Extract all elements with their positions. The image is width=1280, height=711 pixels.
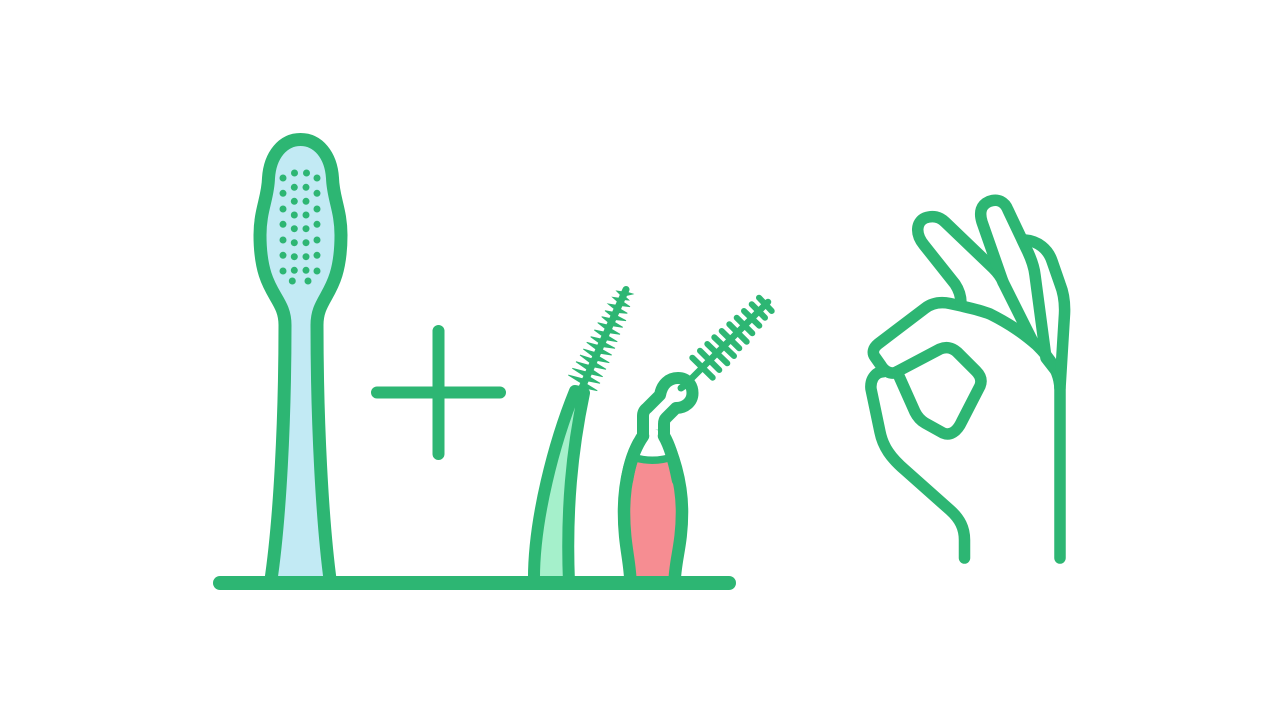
brush wire and bristles <box>684 298 772 386</box>
pink handle <box>624 436 682 583</box>
icon: tapered interdental brush <box>534 290 633 583</box>
ring head and neck <box>643 378 692 438</box>
thumb and index loop <box>897 348 981 434</box>
icon: plus sign <box>377 331 500 454</box>
icon: toothbrush <box>260 140 341 583</box>
white neck and dome <box>634 429 673 462</box>
finger three <box>1025 240 1065 388</box>
icon: angled interdental brush <box>624 298 772 583</box>
cap band <box>631 456 674 460</box>
lower hand outline <box>871 372 964 558</box>
finger two <box>981 200 1060 376</box>
finger one <box>918 217 1032 340</box>
ground line <box>220 576 729 590</box>
wrist and palm edge <box>873 303 1060 558</box>
icon: OK hand gesture <box>871 200 1065 558</box>
